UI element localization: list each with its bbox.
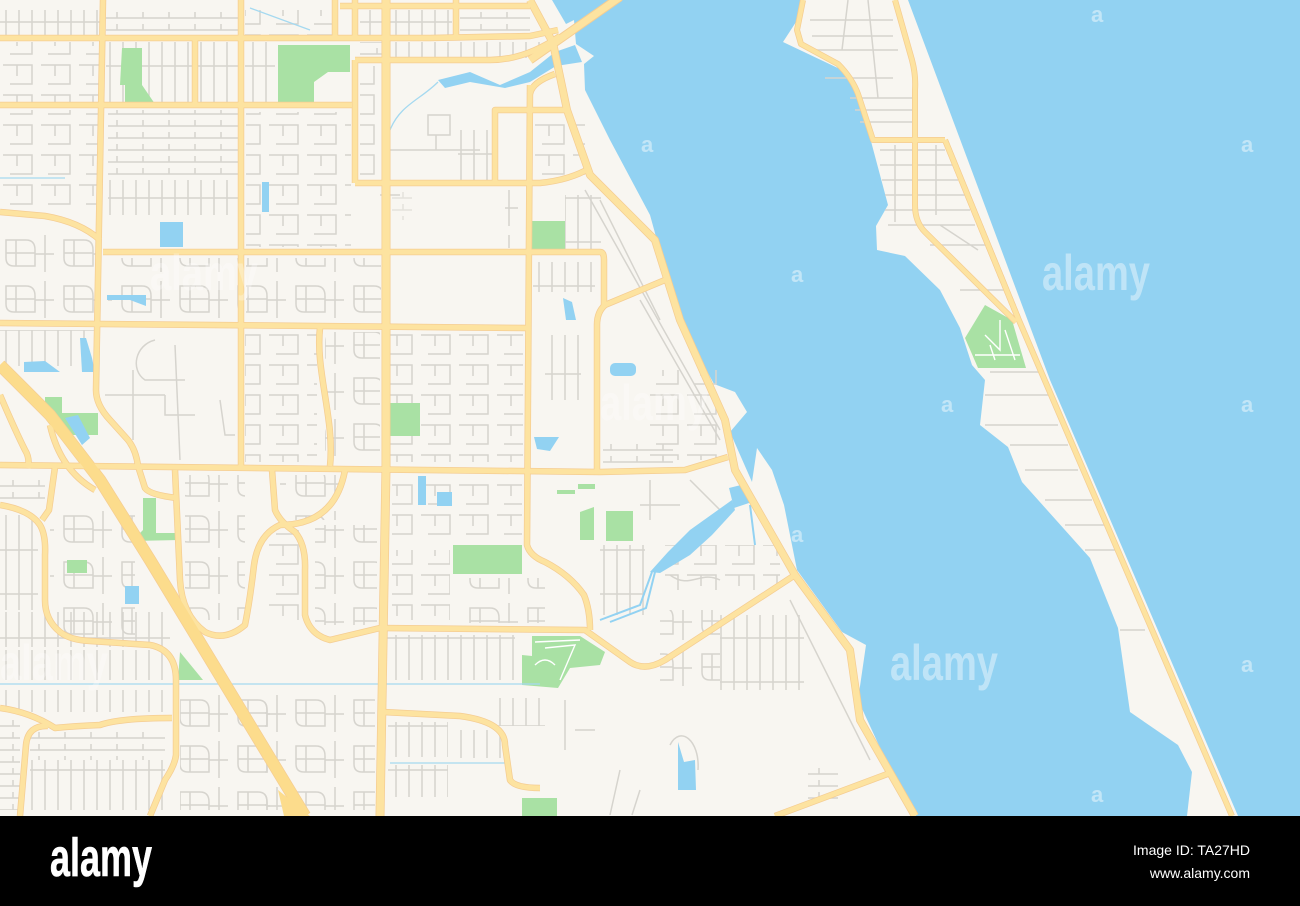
watermark: alamy [1042, 245, 1150, 301]
highway end [278, 790, 310, 816]
watermark: a [1241, 132, 1254, 157]
drainage lines [0, 8, 540, 763]
watermark: alamy [0, 635, 108, 691]
website: www.alamy.com [1149, 865, 1250, 881]
watermark: a [791, 522, 804, 547]
park paths [535, 320, 1020, 680]
minor street network [0, 0, 1145, 815]
footer logo: alamy [50, 828, 152, 888]
watermark: alamy [600, 375, 708, 431]
watermark: a [1091, 782, 1104, 807]
watermark: a [1241, 652, 1254, 677]
barrier island [783, 0, 1238, 816]
watermark: a [641, 132, 654, 157]
watermark: alamy [150, 245, 258, 301]
black footer bar [0, 816, 1300, 906]
image id: Image ID: TA27HD [1133, 842, 1250, 858]
watermark: a [791, 262, 804, 287]
watermark: a [941, 392, 954, 417]
parks [45, 45, 1026, 816]
creeks [600, 505, 755, 622]
watermark: a [1241, 392, 1254, 417]
lakes and canals [24, 45, 752, 790]
mainland [0, 0, 916, 816]
watermark: alamy [890, 635, 998, 691]
watermark: a [1091, 2, 1104, 27]
